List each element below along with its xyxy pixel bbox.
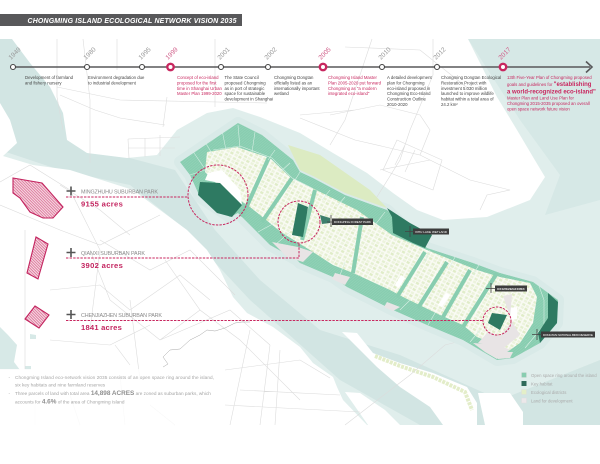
- text: 2010 milestone: Construction Outline: [387, 97, 427, 102]
- text: 2002 milestone: wetland: [274, 91, 289, 96]
- legend: key habitat: Key habitat: [531, 382, 553, 386]
- legend: open space: Open space ring around the island: [531, 373, 597, 378]
- green corridors: [242, 155, 497, 327]
- key habitat: forest patch: [320, 215, 330, 224]
- text: 2010 milestone: eco-island proposed in: [387, 86, 431, 91]
- text: 2012 milestone: launched to improve wildlife: [441, 91, 494, 96]
- text: 2017 milestone: Chongming 2015-2035 proposed an overall: [507, 101, 590, 106]
- node 2002: [263, 46, 279, 70]
- land for development: [272, 242, 520, 359]
- connector lines and circles: [66, 165, 511, 335]
- text: 2017 milestone: open space network future vision: [507, 106, 570, 112]
- text: 2005 milestone: Plan 2005-2020 put forward: [328, 80, 382, 85]
- node 2001: 2001: [216, 46, 232, 61]
- roads: [0, 39, 510, 425]
- text: 2001 milestone: The State Council: [224, 75, 259, 80]
- circle: Mingzhuhu: [188, 165, 248, 225]
- callout: Dongtan wetland park: DONGTAN WETLAND PARK: [497, 287, 526, 291]
- text: 2005 milestone: integrated eco-island": [328, 91, 370, 96]
- text: 2002 milestone: officially listed as an: [274, 80, 313, 85]
- text: 2002 milestone: internationally important: [274, 86, 320, 91]
- panel: summary text: Chongming Island eco-network vision 2035 consists of an open space ring around the island,: [15, 375, 214, 380]
- node 1949: [7, 46, 23, 70]
- inland lake: [0, 327, 36, 370]
- text: 1999 milestone: time in Shanghai Urban: [177, 86, 223, 91]
- node 2005: 2005: [317, 46, 333, 61]
- text: 1999 milestone: Master Plan 1999-2020: [177, 91, 222, 96]
- node 2012: 2012: [432, 46, 448, 61]
- legend: land for development: Land for development: [531, 398, 573, 404]
- panel: summary text: -: [8, 391, 10, 396]
- text: 2012 milestone: habitat within a total area of: [441, 97, 494, 102]
- label: Chenjiazhen park: [66, 310, 162, 332]
- node 2010: 2010: [377, 46, 393, 61]
- text: 2017 milestone: Master Plan and Land Use Plan for: [507, 96, 574, 100]
- text: 2001 milestone: as in port of strategic: [224, 86, 265, 91]
- panel: summary text: [0, 369, 218, 425]
- text: 1999 milestone: proposed for the first: [177, 80, 217, 85]
- legend: ecological districts: Ecological districts: [531, 390, 566, 395]
- node 1980: 1980: [82, 46, 98, 61]
- white clearings: [205, 170, 517, 320]
- callout: Xihu lake wetland: XIHU LAKE WETLAND: [415, 230, 448, 234]
- circle: Qianxi: [278, 201, 320, 243]
- darker water north east: [468, 39, 600, 215]
- node 1995: 1995: [137, 46, 153, 61]
- node 2012: [432, 46, 448, 70]
- label: Qianxi park: QIANXI SUBURBAN PARK: [81, 251, 145, 257]
- callout: Dongtan wetland park: [486, 283, 527, 293]
- text: 2010 milestone: A detailed development: [387, 75, 432, 80]
- text: 2012 milestone: investment 5.030 million: [441, 86, 488, 91]
- node 1949: 1949: [7, 46, 23, 61]
- text: 2012 milestone: Restoration Project with: [441, 80, 487, 85]
- circle: Chenjiazhen: [483, 307, 511, 335]
- legend: [522, 372, 597, 404]
- text: 2001 milestone: space for sustainable: [224, 91, 266, 96]
- text: 1949 milestone: and fishery nursery: [25, 80, 62, 85]
- callout: Xihu lake wetland: [405, 226, 449, 237]
- node 1995: [137, 46, 153, 70]
- open space ring: [180, 123, 558, 360]
- park shape: Qianxi: [27, 237, 48, 279]
- node 2005: [317, 46, 333, 70]
- node 2002: 2002: [263, 46, 279, 61]
- label: Chenjiazhen park: 1841 acres: [81, 323, 122, 332]
- callout: Dongtan bird reserve: [532, 329, 595, 340]
- callout: Dongping forest park: [327, 215, 373, 227]
- key habitat: Xihu lake wetland: [387, 208, 432, 248]
- label: Mingzhuhu park: 9155 acres: [81, 200, 123, 208]
- node 1999: [164, 46, 180, 70]
- arrow head: [586, 62, 592, 72]
- text: 2005 milestone: Chongming as "a modern: [328, 86, 377, 91]
- text: 2010 milestone: Chongming Eco-Island: [387, 91, 431, 96]
- key habitat: Mingzhuhu: [198, 182, 242, 217]
- panel: summary text: Three parcels of land with total area 14,898 ACRES are zoned as suburban parks, which: [15, 390, 211, 397]
- node 1999: 1999: [164, 46, 180, 61]
- text: 1949 milestone: Development of farmland: [25, 75, 74, 80]
- panel: summary text: accounts for 4.6% of the area of Chongming Island: [15, 398, 125, 406]
- text: 2001 milestone: development in Shanghai: [224, 97, 273, 102]
- line: Chenjiazhen: [66, 320, 483, 322]
- text: 2005 milestone: Chongming Island Master: [328, 75, 378, 80]
- sandbar vegetation: [375, 356, 472, 410]
- timeline: [7, 46, 592, 72]
- node 2001: [216, 46, 232, 70]
- text: 2017 milestone: [507, 75, 596, 112]
- north land: [12, 39, 545, 220]
- label: Chenjiazhen park: CHENJIAZHEN SUBURBAN PARK: [81, 313, 162, 319]
- label: Qianxi park: 3902 acres: [81, 261, 123, 270]
- text: 1980 milestone: Environment degradation due: [88, 75, 145, 80]
- band subdivisions: [190, 125, 544, 348]
- label: Mingzhuhu park: MINGZHUHU SUBURBAN PARK: [81, 190, 158, 196]
- title bar: CHONGMING ISLAND ECOLOGICAL NETWORK VISION 2035: [28, 18, 237, 25]
- river creek: [163, 322, 250, 367]
- panel: summary text: six key habitats and nine farmland reserves: [15, 382, 106, 388]
- node 2017: [497, 46, 513, 70]
- key habitat: Dongping: [292, 203, 308, 237]
- title bar: [0, 14, 242, 26]
- line: Mingzhuhu: [66, 196, 188, 198]
- island shoreline halo: [180, 123, 558, 360]
- key habitat: Dongtan wetland park: [488, 313, 507, 330]
- key habitat: bird reserve: [538, 293, 558, 343]
- text: 2010 milestone: 2010-2020: [387, 102, 408, 107]
- label: Mingzhuhu park: [66, 186, 158, 208]
- text: 2002 milestone: Chongming Dongtan: [274, 75, 314, 80]
- node 2010: [377, 46, 393, 70]
- developed districts: [205, 147, 537, 350]
- text: 1999 milestone: Concept of eco-island: [177, 75, 219, 80]
- south land: [0, 103, 367, 425]
- callout: Dongtan bird reserve: DONGTAN NATIONAL BIRD RESERVE: [543, 333, 593, 337]
- park shape: Chenjiazhen: [25, 306, 49, 328]
- lower sandbars: [345, 392, 523, 425]
- panel: summary text: -: [8, 375, 10, 380]
- eastern wetland light green: [288, 145, 387, 208]
- text: 2001 milestone: proposed Chongming: [224, 80, 266, 85]
- text: 2012 milestone: 24.2 km²: [441, 102, 458, 107]
- node 1980: [82, 46, 98, 70]
- text: 2012 milestone: Chongming Dongtan Ecological: [441, 75, 501, 80]
- panel: island map: [180, 123, 558, 360]
- line: Qianxi: [66, 243, 299, 258]
- callout: Dongping forest park: DONGPING FOREST PARK: [334, 220, 372, 224]
- label: Qianxi park: [66, 248, 145, 270]
- sandbar island: [342, 332, 477, 425]
- text: 2017 milestone: goals and guidelines for "establishing: [507, 82, 592, 88]
- park shape: Mingzhuhu: [13, 178, 63, 218]
- text: 2017 milestone: a world-recognized eco-island": [507, 90, 596, 96]
- text: 1980 milestone: to industrial development: [88, 80, 137, 85]
- timeline axis: [13, 66, 590, 68]
- text: 2010 milestone: plan for Chongming: [387, 80, 425, 85]
- node 2017: 2017: [497, 46, 513, 61]
- text: 2017 milestone: 13th Five-Year Plan of Chongming proposed: [507, 75, 592, 80]
